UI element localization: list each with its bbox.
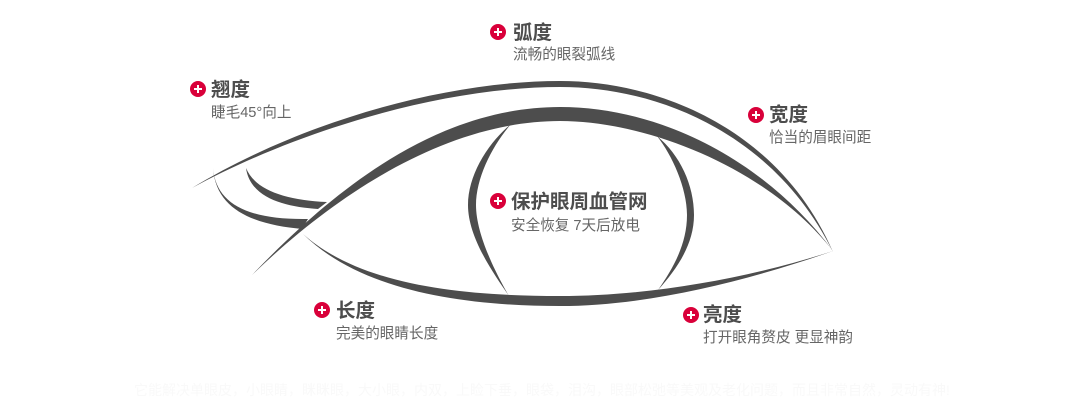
heading: 亮度 — [703, 304, 742, 326]
description: 打开眼角赘皮 更显神韵 — [703, 330, 853, 346]
description: 安全恢复 7天后放电 — [511, 218, 640, 234]
inner eyelash — [246, 168, 327, 209]
lower eyelid — [303, 234, 833, 306]
description: 恰当的眉眼间距 — [769, 130, 871, 146]
label: 亮度 — [683, 304, 853, 346]
icon: plus — [314, 302, 330, 318]
eyebrow arc — [192, 81, 833, 252]
heading: 宽度 — [769, 104, 808, 126]
icon: plus — [490, 24, 506, 40]
upper eyelid — [252, 107, 833, 275]
label: 宽度 — [748, 104, 871, 146]
footer note: 它能解决单眼皮，小眼睛，眯眯眼，大小眼，内双，上睑下垂，眼袋，泪沟，眼部松弛等美观及老化问题，而且非常自然，灵动有神! — [134, 382, 950, 398]
description: 完美的眼睛长度 — [336, 326, 438, 342]
label: 翘度 — [190, 79, 291, 121]
iris right arc — [657, 136, 694, 290]
icon: plus — [683, 307, 699, 323]
description: 流畅的眼裂弧线 — [513, 47, 615, 63]
icon: plus — [490, 193, 506, 209]
description: 睫毛45°向上 — [211, 105, 291, 121]
heading: 翘度 — [211, 79, 250, 101]
label: 保护眼周血管网 — [490, 191, 648, 234]
label: 弧度 — [490, 22, 615, 63]
icon: plus — [190, 81, 206, 97]
heading: 弧度 — [513, 22, 552, 44]
iris left arc — [468, 124, 511, 296]
icon: plus — [748, 107, 764, 123]
outer eyelash — [213, 168, 308, 229]
heading: 长度 — [336, 300, 375, 322]
heading: 保护眼周血管网 — [511, 191, 648, 213]
label: 长度 — [314, 300, 438, 342]
